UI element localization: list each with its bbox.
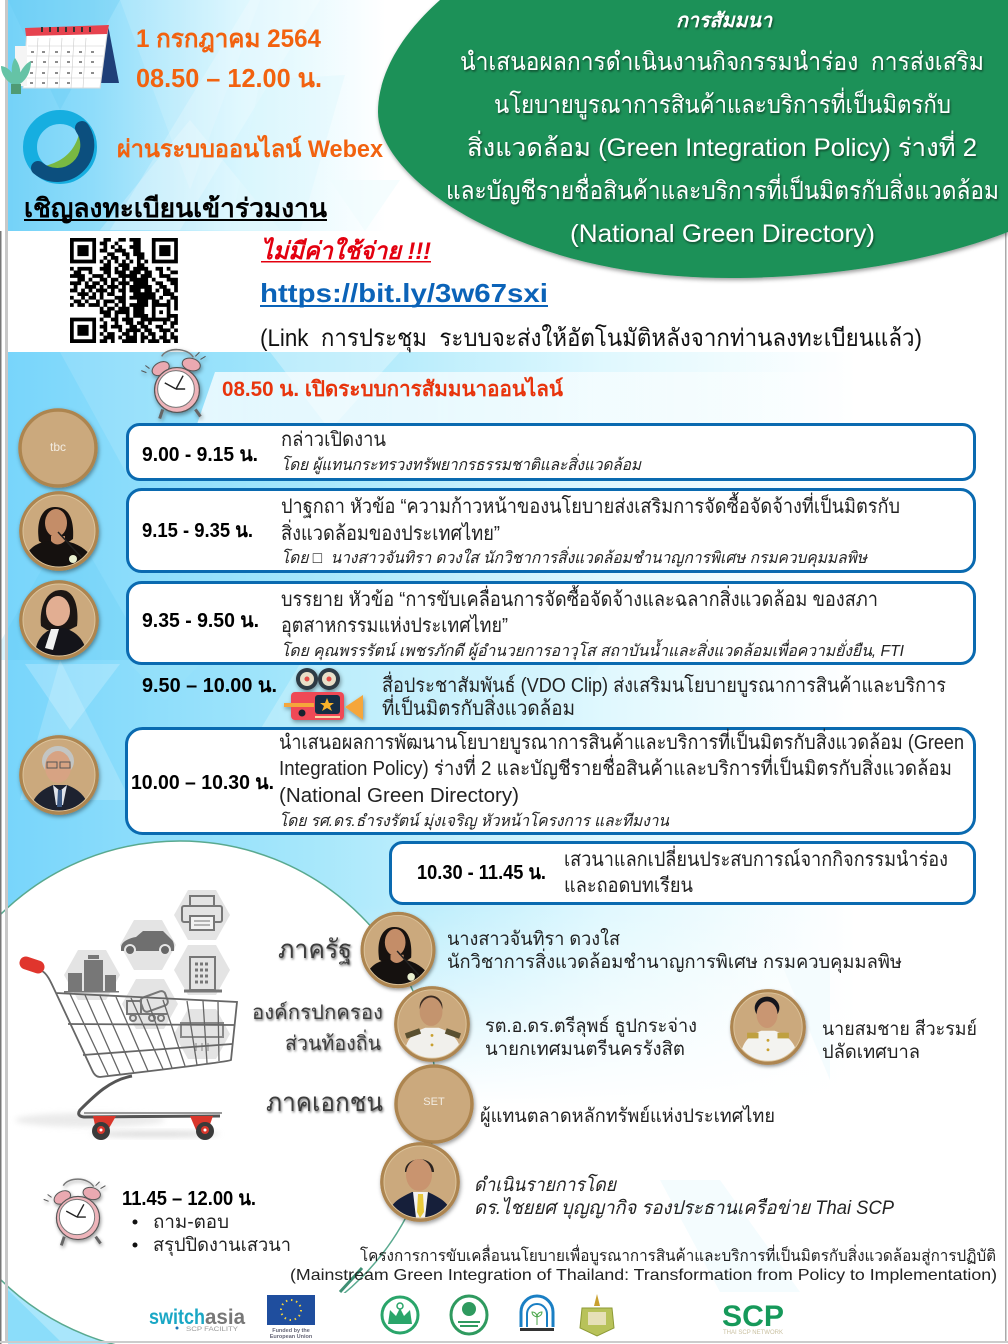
online platform text: ผ่านระบบออนไลน์ Webex: [117, 134, 384, 163]
agenda row 10.00: 10.00 – 10.30 น.: [131, 772, 274, 794]
logo: SCP network: THAI SCP NETWORK: [723, 1329, 784, 1336]
seminar title lines: นโยบายบูรณาการสินค้าและบริการที่เป็นมิตรกับ: [494, 87, 951, 120]
icon: tower: [184, 957, 222, 991]
agenda row 9.50 VDO clip: [142, 671, 946, 720]
sector labels: องค์กรปกครอง: [252, 1001, 383, 1024]
moderator: ดร.ไชยยศ บุญญากิจ รองประธานเครือข่าย Thai SCP: [474, 1196, 894, 1219]
project name: (Mainstream Green Integration of Thailand: Transformation from Policy to Implementation): [290, 1267, 997, 1284]
project name: [290, 1244, 997, 1284]
logo: switch asia: switch: [149, 1306, 205, 1329]
icon: webex logo: [30, 117, 90, 177]
agenda row 9.15: สิ่งแวดล้อมของประเทศไทย”: [281, 519, 500, 545]
agenda row 10.00: [126, 728, 974, 834]
icon: car: [121, 931, 174, 951]
logo: switch asia: SCP FACILITY: [186, 1327, 238, 1333]
panelist: local government 2: [732, 991, 977, 1065]
closing session: [122, 1188, 291, 1257]
closing session: สรุปปิดงานเสวนา: [153, 1235, 291, 1257]
panelist: local government 1: นายกเทศมนตรีนครรังสิต: [485, 1038, 685, 1060]
agenda row 9.35: 9.35 - 9.50 น.: [142, 610, 259, 632]
photo placeholder tbc: [20, 410, 96, 486]
agenda row 9.50 VDO clip: 9.50 – 10.00 น.: [142, 675, 277, 697]
closing session: ถาม-ตอบ: [153, 1212, 229, 1233]
icon: video camera: [284, 668, 363, 720]
QR code: [70, 240, 178, 341]
icon: cement truck: [127, 990, 169, 1021]
logo: Pollution Control Department: [520, 1296, 554, 1331]
time: 08.50 – 12.00 น.: [136, 63, 322, 93]
seminar title lines: [446, 48, 999, 248]
moderator: [382, 1144, 894, 1222]
agenda row 9.00: โดย ผู้แทนกระทรวงทรัพยากรธรรมชาติและสิ่งแวดล้อม: [281, 453, 642, 475]
sector labels: [252, 934, 383, 1117]
logo: department 1: [382, 1297, 418, 1333]
panelist: government: นักวิชาการสิ่งแวดล้อมชำนาญการพิเศษ กรมควบคุมมลพิษ: [447, 948, 902, 974]
agenda row 9.35: โดย คุณพรรรัตน์ เพชรภักดี ผู้อำนวยการอาวุโส สถาบันน้ำและสิ่งแวดล้อมเพื่อความยั่งยืน, FTI: [281, 639, 905, 661]
free of charge note: ไม่มีค่าใช้จ่าย !!!: [261, 237, 431, 265]
wheels: [125, 945, 170, 955]
logo: municipal emblem: [580, 1294, 614, 1336]
agenda row 9.50 VDO clip: สื่อประชาสัมพันธ์ (VDO Clip) ส่งเสริมนโยบายบูรณาการสินค้าและบริการ: [382, 671, 946, 698]
agenda row 9.35: บรรยาย หัวข้อ “การขับเคลื่อนการจัดซื้อจัดจ้างและฉลากสิ่งแวดล้อม ของสภา: [281, 585, 878, 611]
logo: department 2: [451, 1296, 487, 1334]
logo: SCP network: SCP: [722, 1300, 784, 1333]
opening time heading: 08.50 น. เปิดระบบการสัมมนาออนไลน์: [222, 376, 564, 401]
speaker photo 9.15: [21, 493, 97, 571]
hexagon product icons: [64, 890, 230, 1059]
agenda row 10.30 panel discussion: และถอดบทเรียน: [564, 875, 693, 897]
agenda row 10.00: โดย รศ.ดร.ธำรงรัตน์ มุ่งเจริญ หัวหน้าโครงการ และทีมงาน: [279, 811, 670, 831]
icon: alarm clock 08.50: [141, 350, 206, 419]
registration link: https://bit.ly/3w67sxi: [260, 278, 548, 308]
white circle panel with green edge: [0, 841, 1005, 1344]
moderator: ดำเนินรายการโดย: [474, 1173, 618, 1196]
agenda row 9.35: อุตสาหกรรมแห่งประเทศไทย”: [281, 614, 508, 638]
agenda row 9.00: [128, 424, 974, 480]
panelist: government: [362, 914, 902, 988]
panelist: local government 1: [396, 988, 697, 1062]
link note: (Link การประชุม ระบบจะส่งให้อัตโนมัติหลังจากท่านลงทะเบียนแล้ว): [260, 324, 922, 353]
agenda row 9.15: ปาฐกถา หัวข้อ “ความก้าวหน้าของนโยบายส่งเสริมการจัดซื้อจัดจ้างที่เป็นมิตรกับ: [281, 492, 900, 518]
agenda row 9.00: กล่าวเปิดงาน: [281, 429, 386, 451]
agenda row 10.30 panel discussion: 10.30 - 11.45 น.: [417, 862, 546, 884]
icon: printer: [182, 896, 222, 930]
closing session: 11.45 – 12.00 น.: [122, 1188, 256, 1210]
agenda row 9.35: [128, 582, 974, 664]
logo: switch asia: [149, 1306, 245, 1333]
date: 1 กรกฎาคม 2564: [136, 25, 321, 53]
icon: shopping cart: [15, 963, 237, 1140]
photo placeholder tbc: tbc: [50, 440, 66, 454]
agenda row 9.50 VDO clip: ที่เป็นมิตรกับสิ่งแวดล้อม: [382, 694, 575, 720]
agenda row 9.15: [128, 490, 974, 572]
icon: alarm clock closing: [44, 1179, 105, 1245]
panelist: local government 1: รต.อ.ดร.ตรีลุพธ์ ธูปกระจ่าง: [485, 1015, 697, 1038]
logo: EU flag: [267, 1295, 315, 1340]
agenda row 10.30 panel discussion: เสวนาแลกเปลี่ยนประสบการณ์จากกิจกรรมนำร่อง: [564, 845, 948, 871]
green title ellipse: [378, 0, 1008, 278]
panelist: private sector: SET: [423, 1096, 445, 1108]
speaker photo 10.00: [21, 737, 97, 815]
logo: EU flag: Funded by the: [272, 1328, 310, 1334]
seminar title lines: สิ่งแวดล้อม (Green Integration Policy) ร่างที่ 2: [467, 130, 977, 162]
icon: city buildings: [64, 955, 119, 992]
agenda row 9.00: 9.00 - 9.15 น.: [142, 444, 258, 466]
background: upper band: [8, 0, 1005, 231]
icon: calendar: [1, 25, 119, 94]
logo: switch asia: asia: [205, 1306, 245, 1329]
panelist: government: นางสาวจันทิรา ดวงใส: [447, 928, 620, 950]
agenda row 9.15: 9.15 - 9.35 น.: [142, 520, 253, 542]
seminar label: การสัมมนา: [676, 10, 774, 32]
sector labels: ส่วนท้องถิ่น: [285, 1029, 381, 1055]
agenda row 10.30 panel discussion: [390, 842, 974, 904]
speaker photo 9.35: [21, 582, 97, 660]
panelist: local government 2: นายสมชาย สีวะรมย์: [822, 1018, 977, 1040]
seminar title lines: (National Green Directory): [570, 220, 875, 248]
panelist: private sector: [396, 1066, 775, 1142]
panelist: local government 2: ปลัดเทศบาล: [822, 1042, 920, 1063]
icon: air conditioner: [181, 1023, 223, 1051]
sector labels: ภาครัฐ: [278, 934, 352, 965]
agenda row 9.15: โดย □ นางสาวจันทิรา ดวงใส นักวิชาการสิ่งแวดล้อมชำนาญการพิเศษ กรมควบคุมมลพิษ: [281, 546, 868, 568]
agenda row 10.00: (National Green Directory): [279, 785, 519, 807]
agenda row 10.00: Integration Policy) ร่างที่ 2 และบัญชีรายชื่อสินค้าและบริการที่เป็นมิตรกับสิ่งแวดล้อม: [279, 754, 952, 780]
logo: EU flag: European Union: [270, 1334, 313, 1340]
sector labels: ภาคเอกชน: [266, 1087, 383, 1117]
registration heading: เชิญลงทะเบียนเข้าร่วมงาน: [24, 193, 327, 224]
panelist: private sector: ผู้แทนตลาดหลักทรัพย์แห่งประเทศไทย: [480, 1105, 775, 1127]
background: lower band: [0, 352, 1005, 1344]
